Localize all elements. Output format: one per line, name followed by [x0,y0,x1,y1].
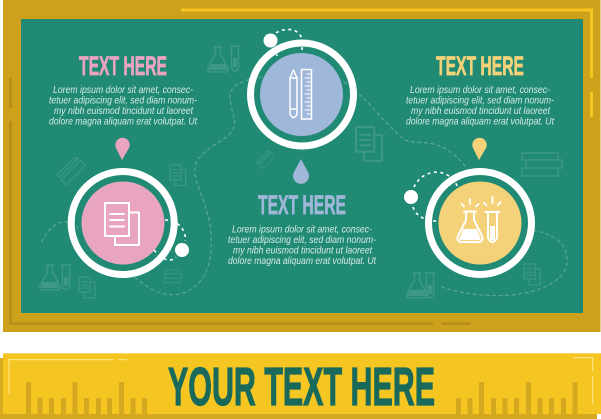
heading: blue: TEXT HERE [258,190,346,220]
text block: pink: Lorem ipsum dolor sit amet, consec- [53,85,193,96]
green board [21,19,583,313]
icon: faint documents bottom left [79,277,95,298]
icon: faint documents centre [356,127,382,161]
text block: blue: Lorem ipsum dolor sit amet, consec- [232,224,372,236]
text block: blue [228,224,377,267]
drop: blue [293,159,309,184]
icon: faint stationery centre [256,150,275,169]
text block: pink: dolore magna aliquam erat volutpat. Ut [49,116,198,128]
text block: blue: my nibh euismod tincidunt ut laoreet [233,246,373,256]
heading: pink: TEXT HERE [79,51,167,81]
text block: blue: tetuer adipiscing elit, sed diam nonum- [228,235,376,246]
pin: yellow [472,138,487,160]
banner [0,353,601,419]
text block: yellow: Lorem ipsum dolor sit amet, consec- [410,85,550,96]
icon: faint books small [164,270,182,283]
text block: yellow: my nibh euismod tincidunt ut laoreet [411,106,551,117]
faint background icons [40,46,562,298]
banner corner lines [8,357,593,404]
icon: faint books top right [522,153,562,176]
icon: faint documents left [170,165,186,185]
icon: faint tube bottom left [61,265,71,290]
text block: blue: dolore magna aliquam erat volutpat. Ut [228,256,377,267]
icon: faint flask bottom left [40,265,60,290]
ruler ticks left [26,382,147,414]
chalkboard frame [3,0,600,332]
icon: yellow flask circle [404,172,532,274]
icon: stationery circle [250,29,354,146]
panel: blue step [228,29,377,267]
icon: faint stationery left [57,156,86,185]
panel: yellow step [404,51,555,274]
icon: faint tube bottom right [425,273,435,298]
icon: faint flask top [208,47,228,72]
icon: faint documents bottom right [524,264,540,285]
icon: pink documents circle [71,172,189,274]
text block: pink [49,85,198,128]
dashed connector paths [42,77,567,296]
text block: yellow: tetuer adipiscing elit, sed diam nonum- [406,96,554,106]
ruler ticks right [456,382,578,414]
text block: yellow [406,85,555,128]
heading: yellow: TEXT HERE [436,51,524,81]
icon: faint tube top [230,46,240,71]
pin: pink [115,138,130,160]
text block: pink: my nibh euismod tincidunt ut laoreet [54,106,194,117]
text block: pink: tetuer adipiscing elit, sed diam nonum- [49,96,197,106]
panel: pink step [49,51,198,274]
text block: yellow: dolore magna aliquam erat volutpat. Ut [406,116,555,128]
icon: faint flask bottom right [407,273,427,298]
